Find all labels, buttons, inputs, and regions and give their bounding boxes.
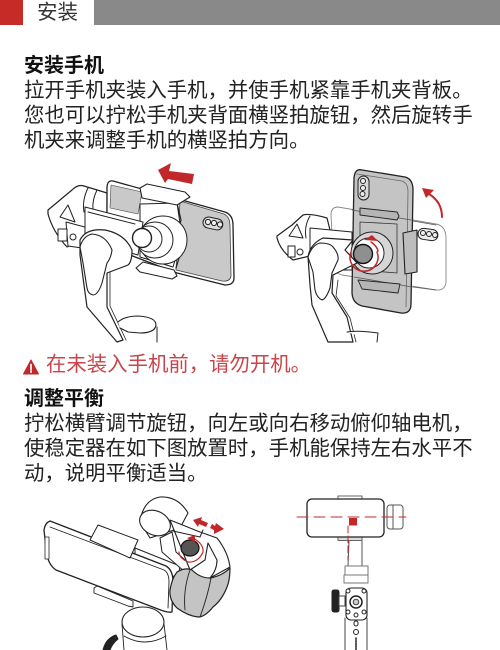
buttons <box>346 589 350 593</box>
header: red block <box>0 0 23 25</box>
body left <box>277 214 335 260</box>
clamp bottom <box>94 586 133 607</box>
text block: install instructions: 拉开手机夹装入手机，并使手机紧靠手机夹背板。 <box>24 80 473 102</box>
head motor ring <box>140 497 188 538</box>
body left <box>48 186 107 247</box>
red square <box>349 518 357 526</box>
red rotation marks <box>350 242 378 271</box>
handle <box>308 238 357 342</box>
red curved arrow <box>429 194 442 217</box>
red arrow: pull left <box>158 163 194 184</box>
illustration: adjusting balance <box>44 497 230 650</box>
base <box>118 316 156 333</box>
phone <box>44 521 173 612</box>
grey motor <box>170 568 230 617</box>
text block: balance instructions: 拧松横臂调节旋钮，向左或向右移动俯仰轴电机， <box>24 413 473 435</box>
clamp top <box>90 525 138 558</box>
camera <box>202 216 224 231</box>
handle arm <box>80 230 132 342</box>
illustration: mounting phone on gimbal <box>48 163 234 342</box>
text block: install instructions <box>24 80 473 152</box>
arm bar <box>85 207 143 255</box>
red circle <box>179 538 203 562</box>
text block: balance instructions: 使稳定器在如下图放置时，手机能保持左右水平不 <box>24 438 473 460</box>
neck <box>348 541 362 566</box>
joystick <box>350 596 362 608</box>
motor <box>351 232 393 274</box>
knob <box>181 540 199 556</box>
illustration: front view balance <box>297 496 406 650</box>
side wheel <box>332 590 339 612</box>
red double arrow <box>193 517 208 527</box>
clamp back <box>140 203 182 267</box>
red dashed balance lines <box>297 516 406 518</box>
ghost phone overlay lines <box>352 210 436 290</box>
warning text: 在未装入手机前，请勿开机。 <box>46 354 311 376</box>
clamp top <box>140 184 190 205</box>
ghost landscape phone <box>331 207 446 290</box>
phone <box>307 499 384 537</box>
illustration: rotating phone clamp <box>277 170 446 342</box>
header: section name: 安装 <box>37 1 78 24</box>
phone body <box>107 181 234 285</box>
top clamp <box>338 496 362 502</box>
text block: install instructions: 机夹来调整手机的横竖拍方向。 <box>24 130 309 152</box>
portrait phone <box>352 170 413 313</box>
text block: balance instructions <box>24 412 473 485</box>
bottom clamp <box>338 536 362 540</box>
side motor <box>387 505 403 529</box>
text block: install instructions: 您也可以拧松手机夹背面横竖拍旋钮，然后旋转手 <box>24 105 473 127</box>
clamp bottom <box>136 262 177 279</box>
motor rings <box>139 216 187 264</box>
back bar <box>135 548 180 578</box>
clamp <box>360 208 399 220</box>
handle <box>346 588 367 620</box>
header: grey bar <box>94 0 500 25</box>
base <box>122 607 164 637</box>
heading: adjust balance: 调整平衡 <box>24 388 104 410</box>
text block: balance instructions: 动，说明平衡适当。 <box>24 463 208 485</box>
arm <box>170 520 230 578</box>
icon: warning triangle <box>23 360 39 374</box>
camera on ghost phone <box>417 228 439 241</box>
base <box>347 331 378 342</box>
warning <box>23 354 311 376</box>
side clamp <box>403 230 417 274</box>
heading: install phone: 安装手机 <box>24 55 104 77</box>
